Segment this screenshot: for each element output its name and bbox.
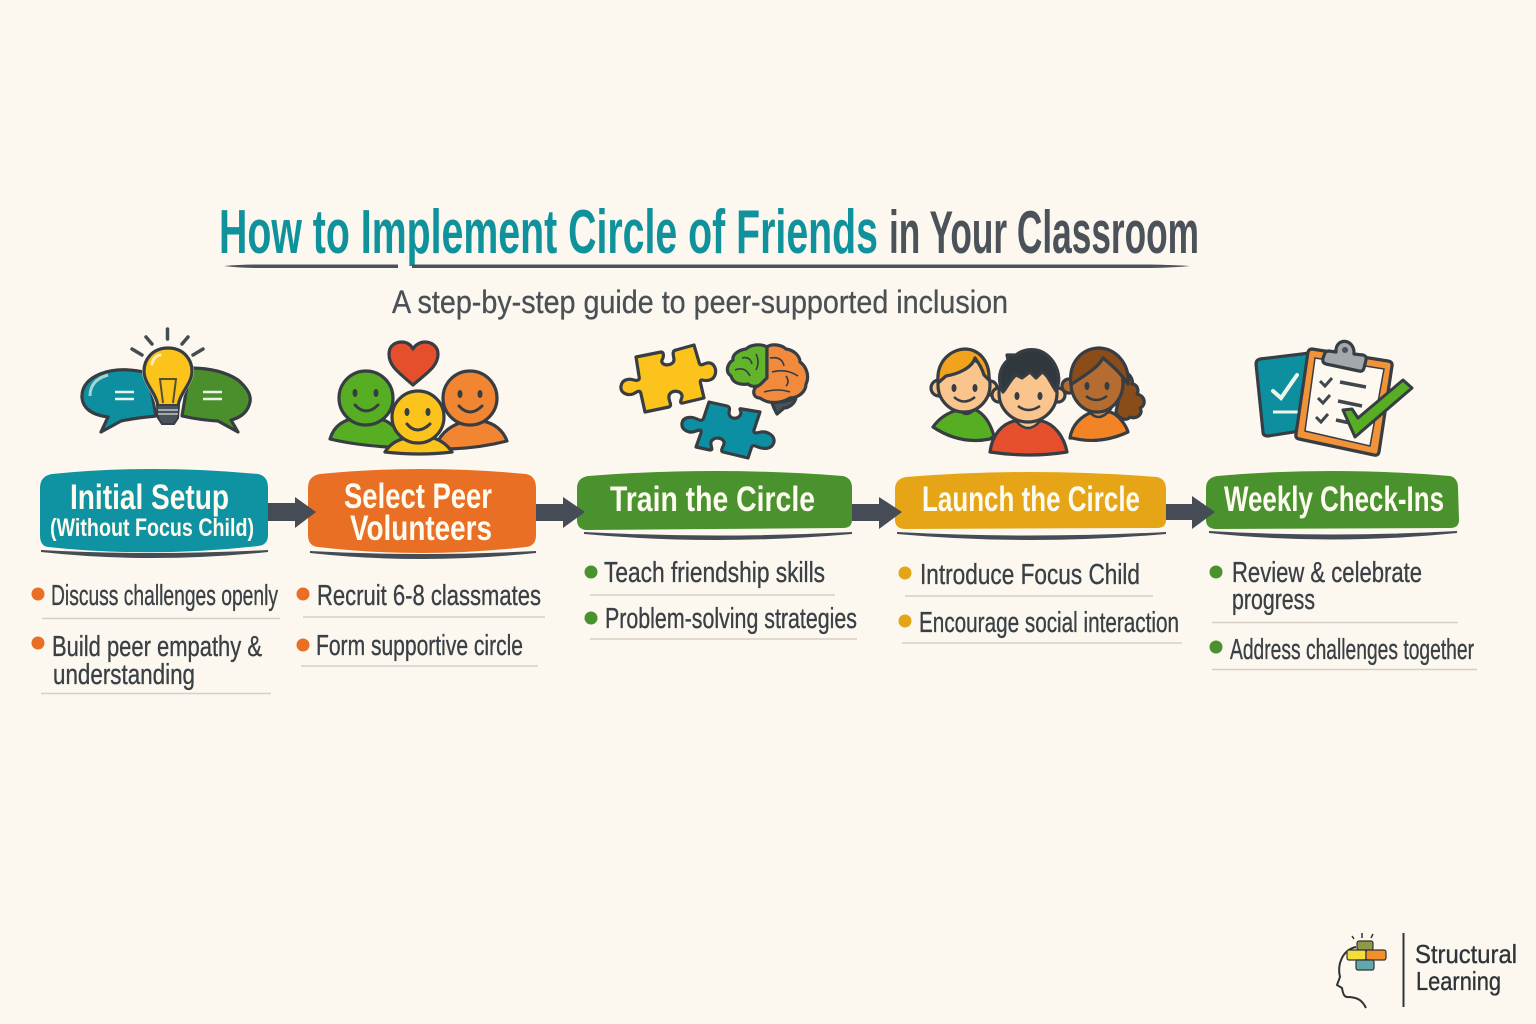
title: in Your Classroom	[889, 199, 1199, 266]
panel: step 2 header: Select Peer	[344, 477, 492, 516]
text block: step 1 bullets: Build peer empathy &	[52, 631, 262, 663]
text block: step 5 bullets	[1210, 557, 1477, 670]
text block: step 5 bullets: progress	[1232, 584, 1315, 616]
panel: step 4 header: Launch the Circle	[922, 480, 1140, 519]
panel: step 1 header: (Without Focus Child)	[50, 514, 254, 542]
text block: step 1 bullets: Discuss challenges openly	[51, 580, 278, 612]
arrow: step 1 to 2	[268, 497, 316, 528]
icon: three smiling peers with heart	[330, 342, 507, 454]
logo: Structural Learning: Structural	[1415, 939, 1517, 969]
panel: step 5 header	[1206, 471, 1459, 540]
text block: step 1 bullets	[32, 580, 280, 694]
text block: step 4 bullets	[898, 559, 1182, 643]
text block: step 2 bullets: Form supportive circle	[316, 630, 523, 662]
logo: Structural Learning	[1337, 933, 1517, 1008]
panel: step 3 header: Train the Circle	[610, 480, 815, 519]
panel: step 1 header	[40, 469, 268, 558]
icon: puzzle pieces and brain	[621, 345, 808, 458]
text block: step 4 bullets: Encourage social interaction	[919, 607, 1179, 639]
title: How to Implement Circle of Friends	[219, 198, 878, 267]
icon: speech bubbles and light bulb	[82, 329, 250, 432]
panel: step 5 header: Weekly Check-Ins	[1224, 480, 1444, 519]
arrow: step 4 to 5	[1166, 496, 1215, 529]
text block: step 3 bullets: Problem-solving strategies	[605, 603, 857, 635]
arrow: step 2 to 3	[536, 497, 585, 528]
arrow: step 3 to 4	[852, 497, 902, 529]
panel: step 4 header	[895, 472, 1166, 540]
icon: three children	[931, 348, 1144, 455]
subtitle: A step-by-step guide to peer-supported inclusion	[392, 284, 1008, 320]
panel: step 3 header	[577, 471, 852, 540]
logo: Structural Learning: Learning	[1416, 966, 1501, 996]
text block: step 3 bullets	[584, 557, 857, 639]
icon: clipboard and check card	[1256, 341, 1412, 455]
text block: step 2 bullets	[296, 580, 545, 666]
text block: step 5 bullets: Review & celebrate	[1232, 557, 1422, 589]
text block: step 4 bullets: Introduce Focus Child	[920, 559, 1140, 591]
text block: step 1 bullets: understanding	[53, 659, 195, 691]
panel: step 1 header: Initial Setup	[70, 478, 229, 517]
text block: step 2 bullets: Recruit 6-8 classmates	[317, 580, 541, 612]
panel: step 2 header	[308, 469, 536, 559]
panel: step 2 header: Volunteers	[350, 509, 492, 548]
text block: step 3 bullets: Teach friendship skills	[604, 557, 825, 589]
